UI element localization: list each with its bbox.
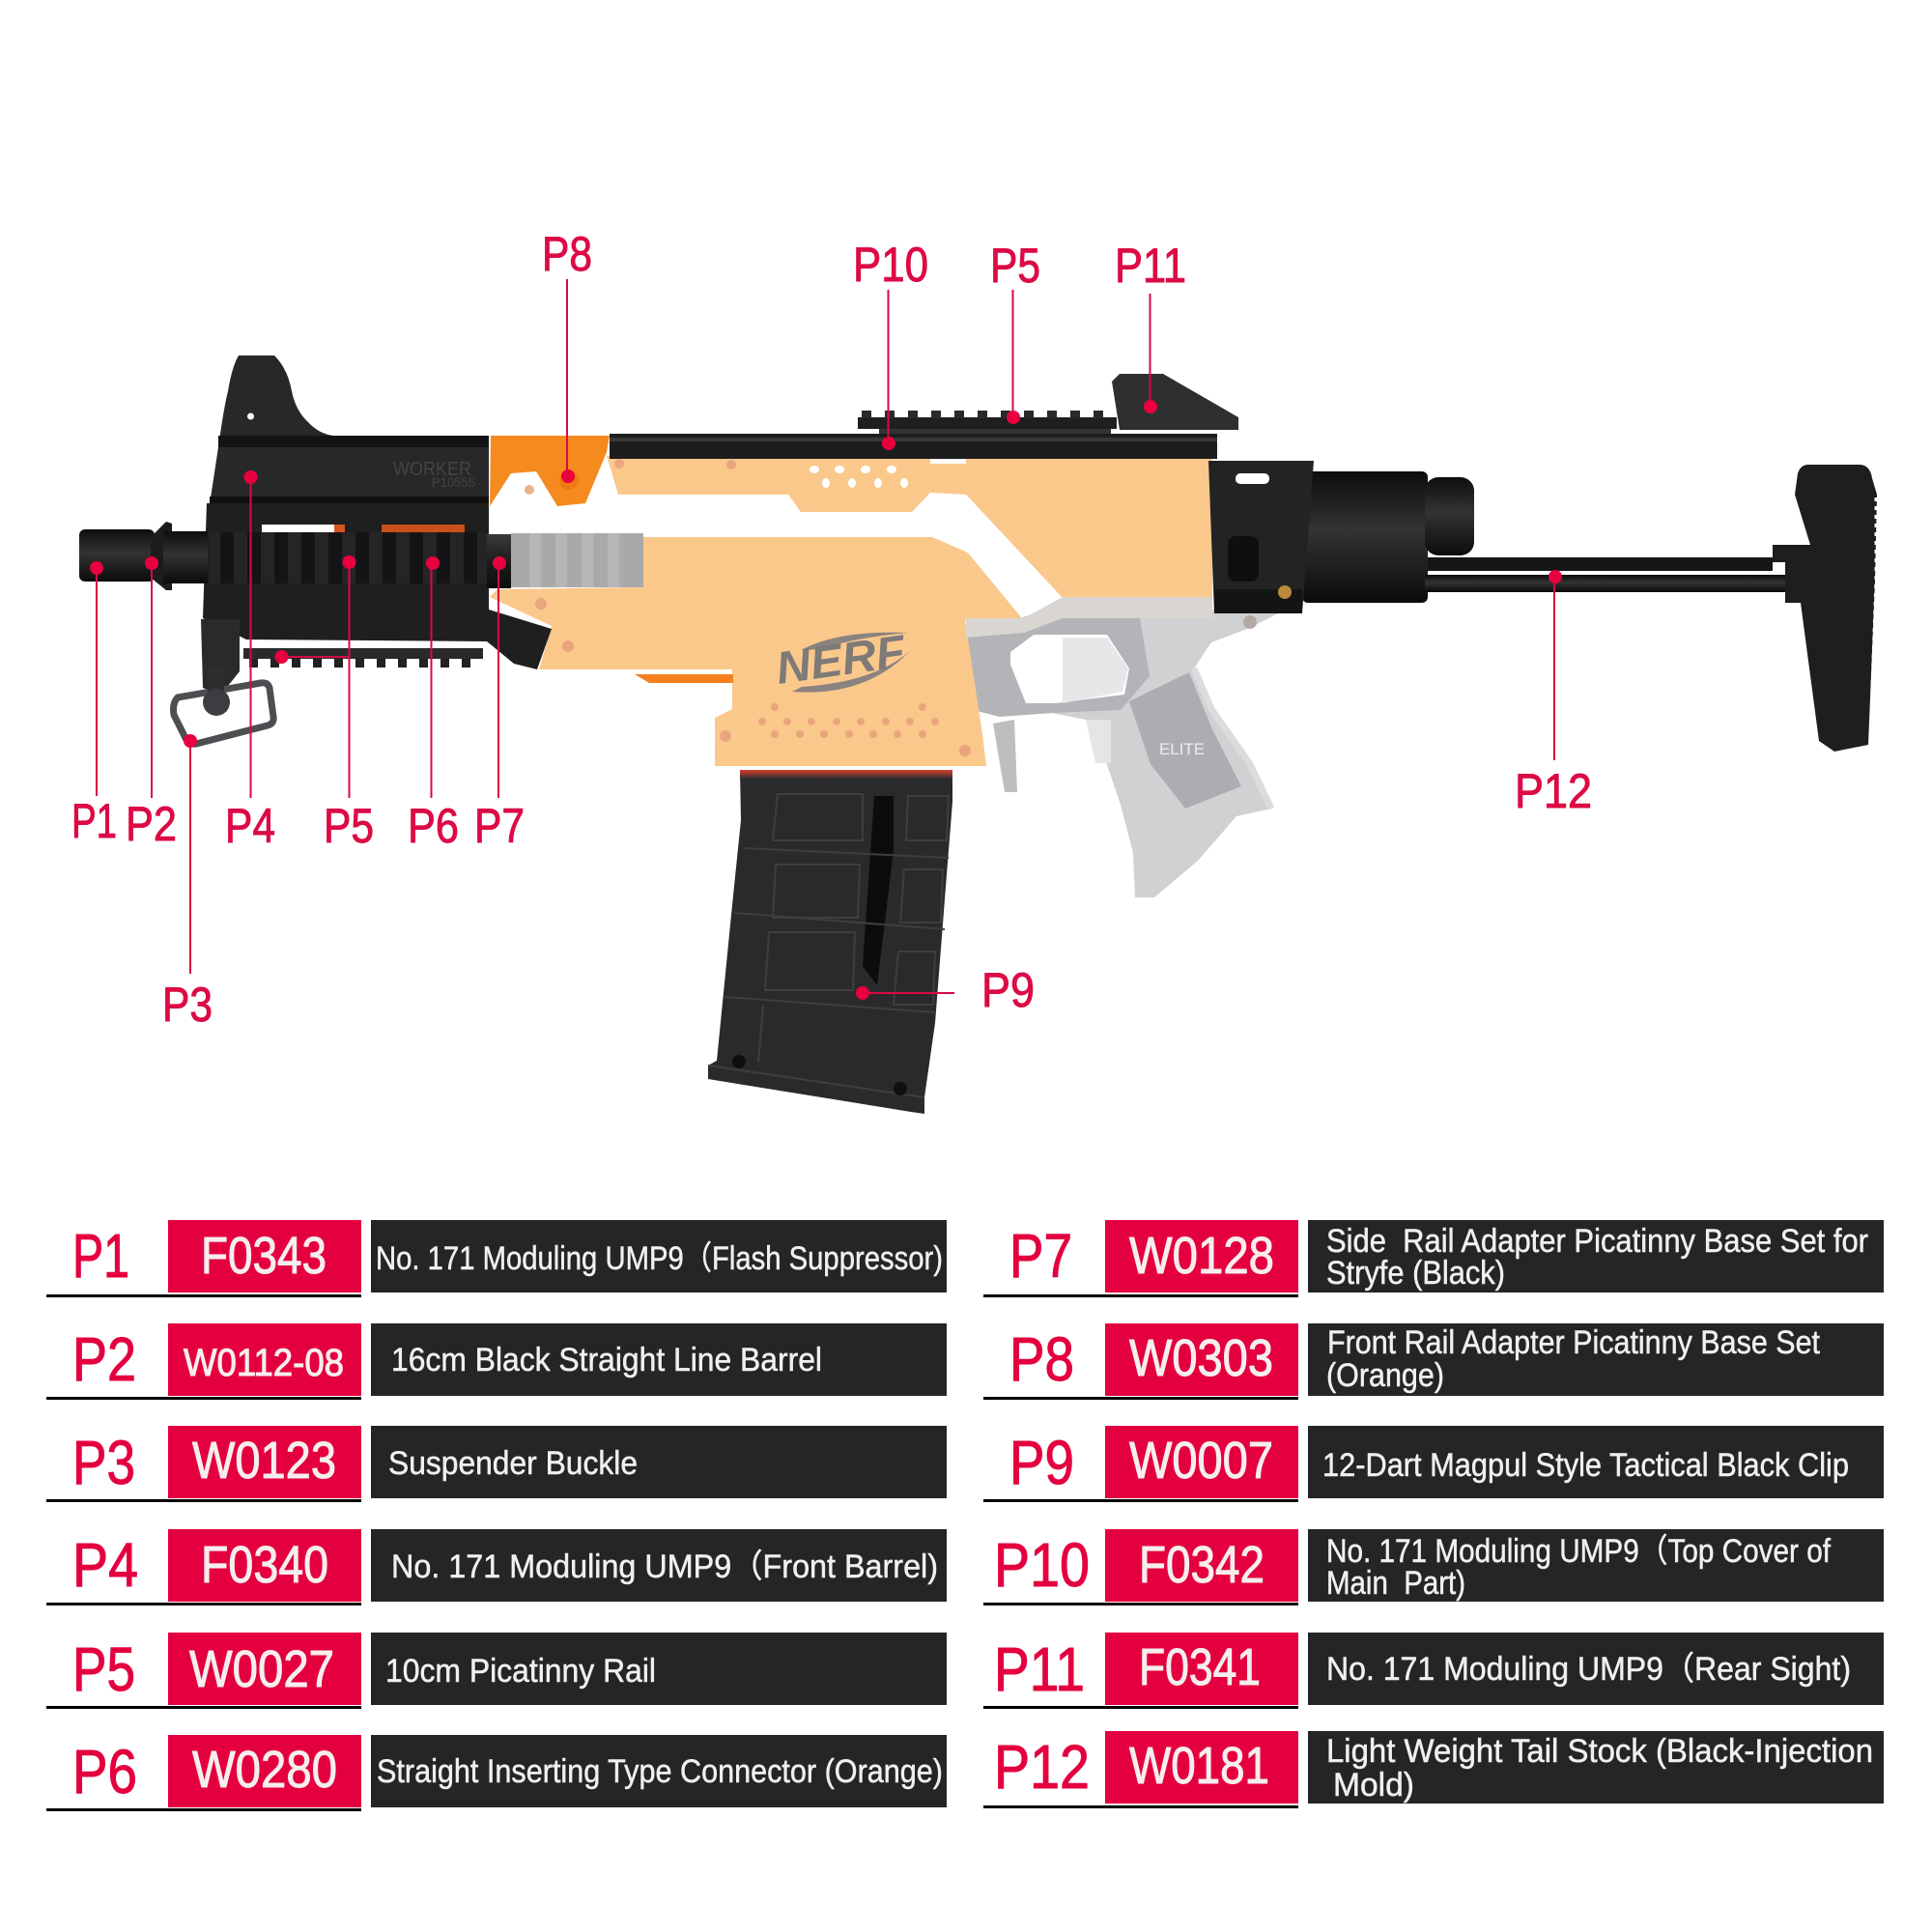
row P2: W0112-08: [184, 1342, 344, 1384]
row P9: 12-Dart Magpul Style Tactical Black Clip: [1322, 1447, 1849, 1484]
row P9: W0007: [1129, 1432, 1273, 1490]
row P7: P7: [1009, 1221, 1072, 1291]
row P5: P5: [72, 1634, 135, 1704]
row P12: [983, 1731, 1884, 1808]
ghosted trigger grip: ELITE: [1159, 740, 1205, 758]
callout P2: P2: [126, 797, 177, 851]
row P2: 16cm Black Straight Line Barrel: [391, 1342, 822, 1378]
row P3: W0123: [192, 1432, 336, 1490]
lower orange strip: [635, 674, 733, 683]
top cover: [610, 434, 1217, 459]
flash suppressor: [79, 529, 155, 582]
callout P11: P11: [1115, 239, 1186, 293]
row P3: P3: [72, 1428, 135, 1497]
callout P3: P3: [162, 978, 213, 1032]
row P6: W0280: [192, 1741, 337, 1799]
front barrel and sight: [210, 355, 489, 504]
row P2: P2: [72, 1324, 136, 1394]
row P1: P1: [72, 1221, 129, 1291]
callout P10: P10: [853, 238, 928, 292]
row P7: Side Rail Adapter Picatinny Base Set for: [1326, 1223, 1868, 1260]
suspender buckle: [174, 667, 273, 744]
row P3: [46, 1426, 947, 1502]
row P5: 10cm Picatinny Rail: [385, 1653, 656, 1690]
row P11: No. 171 Moduling UMP9（Rear Sight): [1326, 1651, 1851, 1688]
handguard: [203, 503, 552, 669]
callout P4: [225, 470, 275, 853]
row P7: W0128: [1129, 1227, 1274, 1285]
barrel with flare: [151, 522, 208, 590]
blaster illustration: [79, 355, 1877, 1114]
callout P6: [408, 556, 459, 853]
callout P12: [1515, 570, 1592, 818]
butt plate: [1773, 465, 1877, 752]
row P5: [46, 1633, 947, 1709]
grey side rail: [511, 533, 643, 587]
row P11: F0341: [1139, 1638, 1261, 1696]
callout P6: P6: [408, 799, 459, 853]
row P8: P8: [1009, 1324, 1074, 1394]
stock adapter block: [1208, 461, 1314, 613]
ghosted trigger grip: [967, 602, 1280, 897]
callout P8: P8: [542, 227, 592, 281]
callout P11: [1115, 239, 1186, 413]
row P3: Suspender Buckle: [388, 1445, 638, 1482]
row P8: [983, 1323, 1884, 1400]
row P4: No. 171 Moduling UMP9（Front Barrel): [391, 1548, 938, 1585]
row P11: [983, 1633, 1884, 1709]
row P8: W0303: [1129, 1329, 1273, 1387]
row P7: Stryfe (Black): [1326, 1255, 1505, 1292]
row P8: Front Rail Adapter Picatinny Base Set: [1327, 1324, 1820, 1361]
callout P4: P4: [225, 799, 275, 853]
NERF logo: NERF: [773, 625, 909, 694]
magazine: [708, 770, 952, 1114]
stock cylinder: [1302, 471, 1474, 603]
callout P5 upper: [990, 239, 1040, 424]
lower receiver and magazine well: [490, 537, 1022, 766]
callout P5 lower: P5: [324, 799, 374, 853]
parts table right column: [983, 1220, 1884, 1808]
row P10: P10: [994, 1530, 1090, 1600]
front barrel and sight: WORKER: [393, 459, 471, 480]
upper receiver body: [607, 456, 1212, 597]
row P4: [46, 1529, 947, 1605]
row P10: Main Part): [1326, 1565, 1465, 1602]
row P12: W0181: [1129, 1737, 1269, 1795]
row P9: P9: [1009, 1428, 1074, 1497]
callout P10: [853, 238, 928, 450]
row P10: [983, 1529, 1884, 1605]
callout P1: P1: [71, 794, 117, 848]
callout P9: P9: [981, 963, 1035, 1017]
callout P2: [126, 556, 177, 851]
callout P9: [856, 963, 1035, 1017]
row P10: F0342: [1139, 1536, 1264, 1594]
stock rods: [1425, 557, 1785, 592]
rear sight: [1112, 374, 1238, 430]
parts table left column: [46, 1220, 947, 1811]
callout P3: [162, 734, 213, 1032]
callout P12: P12: [1515, 764, 1592, 818]
front barrel and sight: P10555: [432, 474, 475, 490]
peach body dots: [535, 459, 971, 756]
callout P8: [542, 227, 592, 483]
row P10: No. 171 Moduling UMP9（Top Cover of: [1326, 1533, 1831, 1570]
callout P7: P7: [474, 799, 525, 853]
row P12: P12: [994, 1732, 1090, 1802]
top picatinny rail: [858, 411, 1117, 434]
row P12: Light Weight Tail Stock (Black-Injection: [1326, 1733, 1873, 1770]
row P1: [46, 1220, 947, 1297]
lower picatinny rail: [201, 619, 483, 696]
row P6: P6: [72, 1737, 137, 1806]
callout P5 lower: [274, 555, 374, 853]
row P6: Straight Inserting Type Connector (Orange): [377, 1753, 943, 1790]
row P6: [46, 1735, 947, 1811]
row P4: F0340: [201, 1536, 328, 1594]
orange front rail adapter: [490, 436, 610, 506]
row P11: P11: [994, 1634, 1085, 1704]
row P12: Mold): [1333, 1767, 1414, 1804]
row P2: [46, 1323, 947, 1400]
row P4: P4: [72, 1530, 138, 1600]
row P1: No. 171 Moduling UMP9（Flash Suppressor): [376, 1240, 943, 1277]
callouts: [71, 227, 1592, 1032]
row P8: (Orange): [1326, 1357, 1444, 1394]
side barrel: [487, 534, 511, 588]
callout P1: [71, 561, 117, 848]
row P1: F0343: [201, 1227, 327, 1285]
callout P5 upper: P5: [990, 239, 1040, 293]
row P5: W0027: [189, 1640, 334, 1698]
row P9: [983, 1426, 1884, 1502]
callout P7: [474, 556, 525, 853]
row P7: [983, 1220, 1884, 1297]
